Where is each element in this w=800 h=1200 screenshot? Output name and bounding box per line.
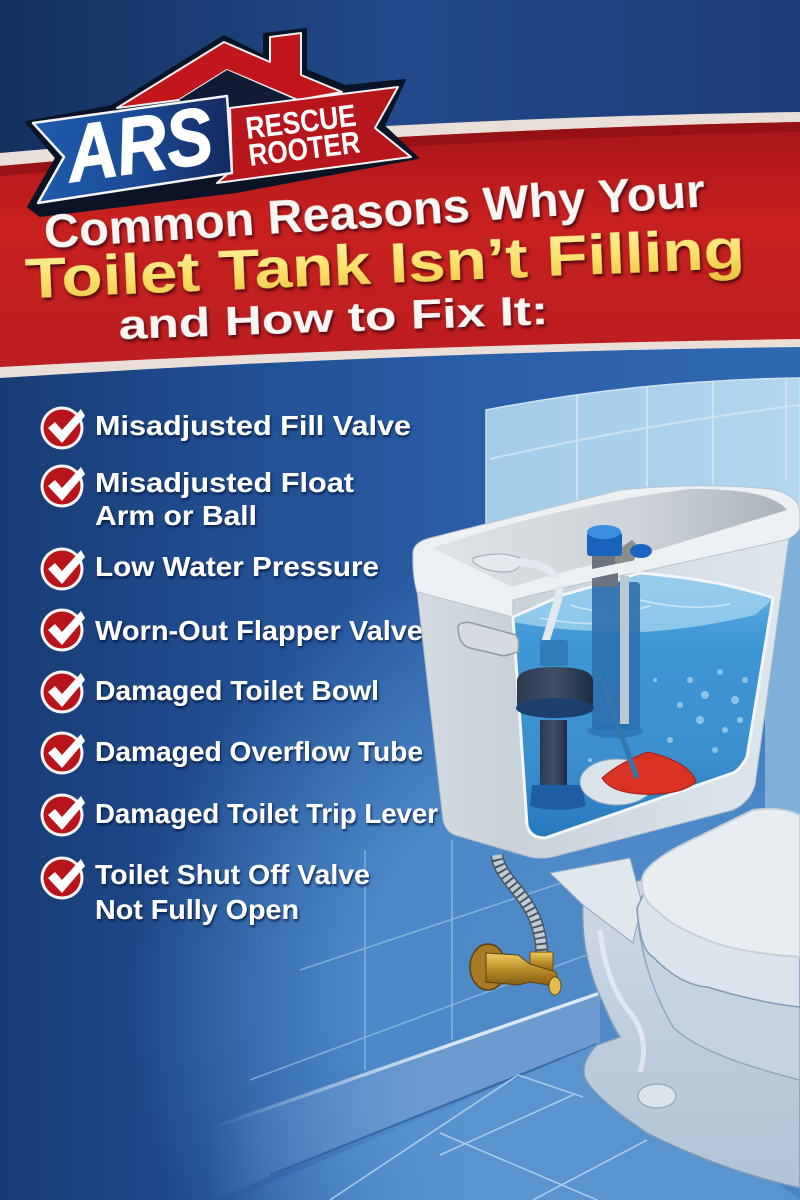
checklist: [40, 406, 438, 925]
valve flange: [470, 944, 506, 990]
item: misadjusted fill valve: [40, 406, 411, 450]
item: low water pressure: [40, 548, 379, 590]
item: misadjusted fill valve: Misadjusted Fill Valve: [95, 410, 411, 441]
title: [24, 164, 746, 348]
upper tile panel: [486, 378, 800, 600]
red ribbon: [217, 87, 411, 183]
illustration: supply hose and shut-off valve: [470, 855, 561, 995]
lid: [642, 809, 800, 957]
tank interior: [432, 489, 787, 587]
item: toilet shut off valve: Toilet Shut Off Valve: [95, 859, 370, 890]
tank body: [417, 530, 790, 858]
bolt cap: [638, 1084, 676, 1108]
item: misadjusted float arm or ball: Misadjusted Float: [95, 467, 354, 498]
title line 1: Common Reasons Why Your: [42, 164, 706, 258]
item: damaged overflow tube: Damaged Overflow Tube: [95, 736, 423, 767]
front lip: [513, 530, 790, 594]
overflow tube: [587, 576, 643, 738]
item: damaged toilet bowl: Damaged Toilet Bowl: [95, 675, 379, 706]
fill valve cap: [587, 525, 652, 587]
item: worn-out flapper valve: [40, 608, 423, 652]
red flapper: [602, 752, 696, 794]
flapper rod: [597, 668, 637, 778]
ARS wordmark: ARS: [59, 90, 218, 199]
seat rim: [637, 880, 800, 1007]
trip lever handle: [458, 622, 519, 656]
braided hose: [497, 855, 542, 955]
wall tiles and floor: [213, 378, 800, 1200]
bowl pedestal: [583, 880, 800, 1188]
item: low water pressure: Low Water Pressure: [95, 551, 379, 582]
blue ribbon: [33, 96, 232, 203]
seat shelf: [550, 858, 642, 943]
illustration: toilet bowl and seat: [550, 809, 800, 1188]
Rooter wordmark: ROOTER: [247, 125, 362, 173]
valve body: [486, 953, 560, 987]
item: toilet shut off valve: [40, 856, 370, 925]
title line 3: and How to Fix It:: [118, 287, 549, 348]
red title banner: [0, 112, 800, 378]
item: worn-out flapper valve: Worn-Out Flapper Valve: [95, 615, 423, 646]
bowl highlights: [600, 930, 644, 1072]
water bubbles: [533, 669, 748, 792]
house interior: [179, 70, 296, 110]
water cutaway: [513, 573, 773, 838]
braided supply tube: [518, 562, 559, 640]
item: damaged toilet trip lever: [40, 794, 438, 836]
item: damaged toilet bowl: [40, 670, 379, 714]
tank rim: [413, 486, 800, 617]
item: misadjusted float arm or ball: [40, 464, 354, 531]
item: damaged overflow tube: [40, 732, 423, 774]
title line 2: Toilet Tank Isn’t Filling: [24, 217, 746, 311]
illustration: toilet tank: [413, 486, 800, 858]
bowl front: [637, 907, 800, 1080]
house roof: [117, 33, 342, 108]
logo dark outline: [26, 29, 418, 216]
water surface: [514, 575, 772, 632]
Rescue wordmark: RESCUE: [244, 98, 358, 146]
item: toilet shut off valve: Not Fully Open: [95, 894, 299, 925]
valve collar: [530, 952, 553, 974]
logo: ARS Rescue Rooter: [26, 29, 418, 216]
refill fitting: [473, 554, 520, 572]
floor: [230, 1044, 800, 1200]
float valve: [516, 640, 594, 810]
item: damaged toilet trip lever: Damaged Toilet Trip Lever: [95, 798, 438, 829]
valve outlet: [549, 977, 561, 995]
flapper seat: [580, 759, 654, 805]
water ripples: [540, 600, 730, 624]
item: misadjusted float arm or ball: Arm or Ball: [95, 500, 257, 531]
baseboard: [213, 993, 600, 1200]
